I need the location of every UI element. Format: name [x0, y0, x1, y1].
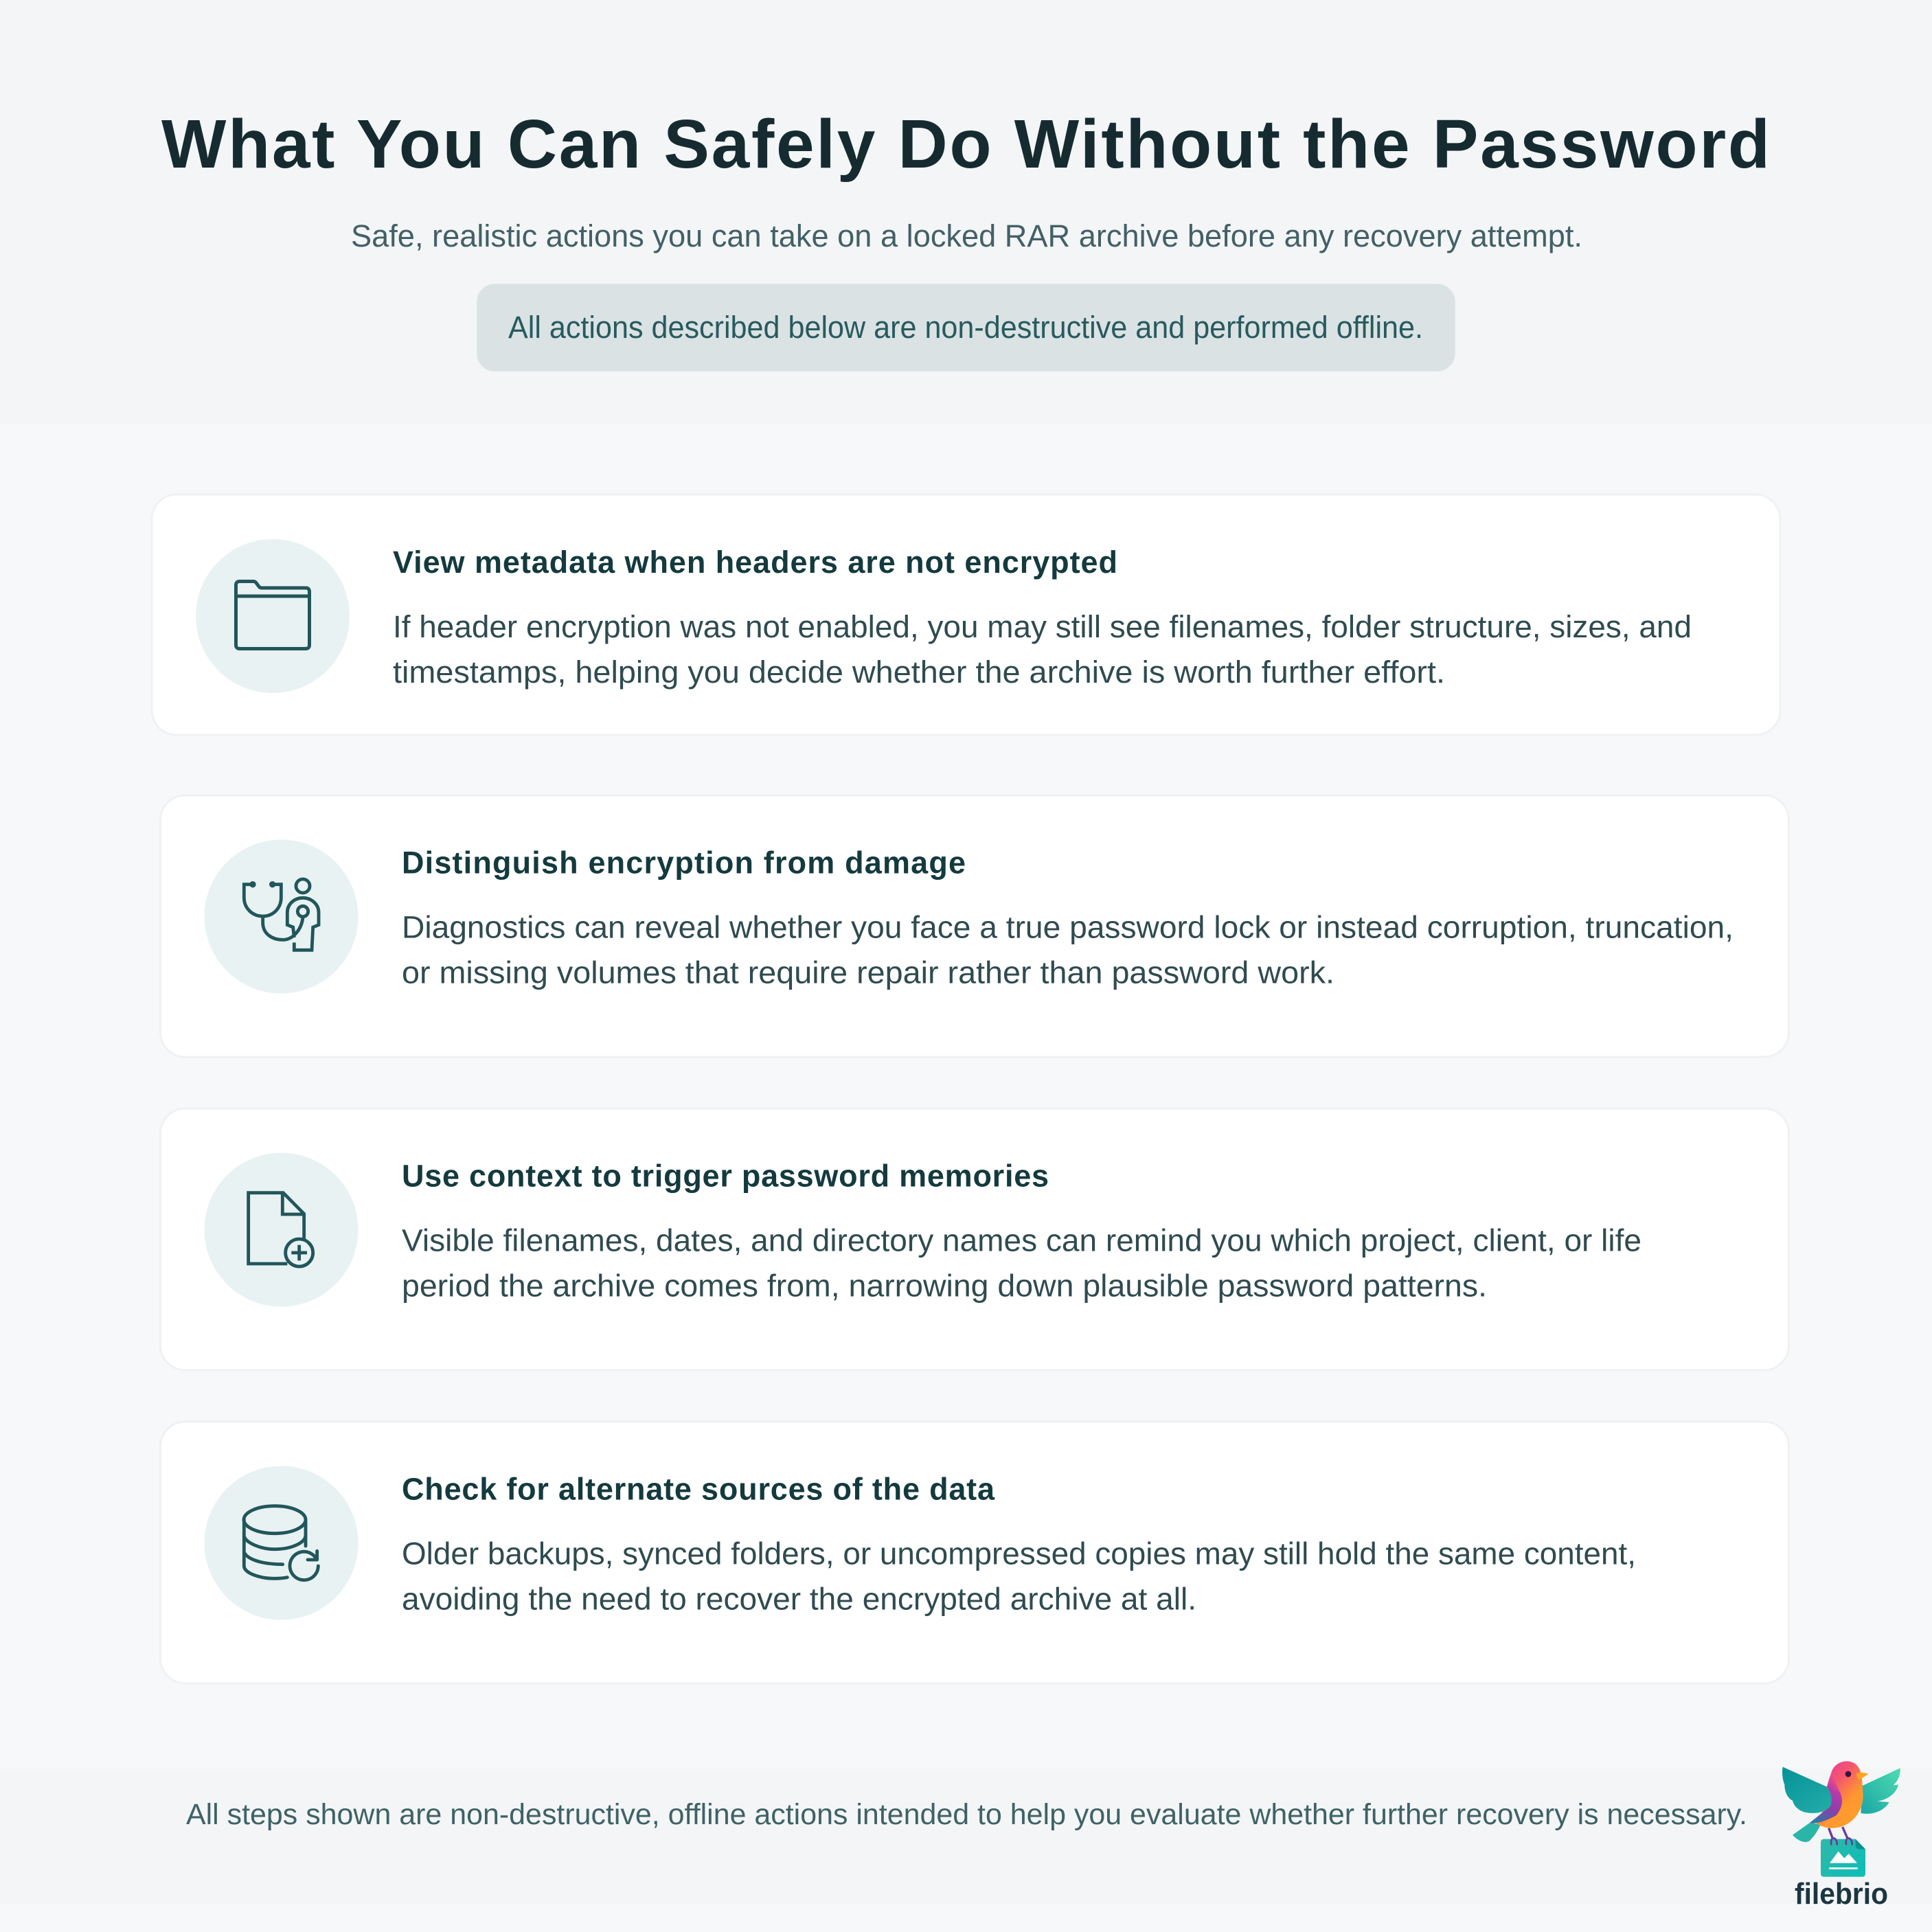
card body text: [402, 1223, 1641, 1304]
icon: file with plus: [249, 1193, 313, 1266]
header band: [0, 0, 1932, 424]
subtitle: Safe, realistic actions you can take on a locked RAR archive before any recovery attempt.: [351, 218, 1582, 253]
panel: alternate sources card: [161, 1422, 1788, 1683]
panel: use context card: [161, 1109, 1788, 1370]
logo wordmark: filebrio: [1795, 1877, 1888, 1911]
card background: [161, 1109, 1788, 1370]
pill text: All actions described below are non-destructive and performed offline.: [508, 310, 1423, 345]
footer section: [0, 1769, 1932, 1904]
card heading: Distinguish encryption from damage: [402, 845, 966, 880]
card body text: [402, 1536, 1636, 1617]
icon: bird on file: [1782, 1761, 1900, 1877]
panel: distinguish encryption card: [161, 795, 1788, 1057]
footer band: [0, 1769, 1932, 1904]
card body text: Diagnostics can reveal whether you face a true password lock or instead corruption, truncation,: [402, 909, 1734, 945]
card body text: avoiding the need to recover the encrypted archive at all.: [402, 1581, 1196, 1617]
card body text: Older backups, synced folders, or uncompressed copies may still hold the same content,: [402, 1536, 1636, 1571]
card body text: period the archive comes from, narrowing down plausible password patterns.: [402, 1268, 1487, 1304]
icon circle: [205, 839, 359, 993]
card background: [161, 1422, 1788, 1683]
icon: stethoscope and person: [244, 879, 319, 950]
card body text: timestamps, helping you decide whether the archive is worth further effort.: [393, 655, 1445, 690]
panel: view metadata card: [152, 495, 1780, 735]
card heading: Check for alternate sources of the data: [402, 1471, 995, 1507]
card body text: [393, 609, 1692, 690]
card background: [152, 495, 1780, 735]
icon circle: [205, 1152, 359, 1306]
card body text: or missing volumes that require repair rather than password work.: [402, 955, 1334, 990]
logo: filebrio: [1782, 1761, 1900, 1911]
card heading: Use context to trigger password memories: [402, 1158, 1049, 1194]
card body text: [402, 909, 1734, 990]
card body text: Visible filenames, dates, and directory names can remind you which project, client, or life: [402, 1223, 1641, 1258]
footer text: All steps shown are non-destructive, offline actions intended to help you evaluate whether further recovery is necessary.: [186, 1798, 1747, 1831]
pill background: [477, 284, 1455, 371]
title: What You Can Safely Do Without the Password: [161, 106, 1770, 183]
card heading: View metadata when headers are not encrypted: [393, 545, 1117, 580]
icon circle: [205, 1466, 359, 1620]
header section: [0, 0, 1932, 424]
notice pill: [477, 284, 1455, 371]
icon: folder: [236, 581, 309, 648]
icon: database with refresh arrow: [244, 1506, 318, 1580]
icon circle: [196, 539, 350, 693]
card body text: If header encryption was not enabled, you may still see filenames, folder structure, sizes, and: [393, 609, 1692, 644]
card background: [161, 795, 1788, 1057]
